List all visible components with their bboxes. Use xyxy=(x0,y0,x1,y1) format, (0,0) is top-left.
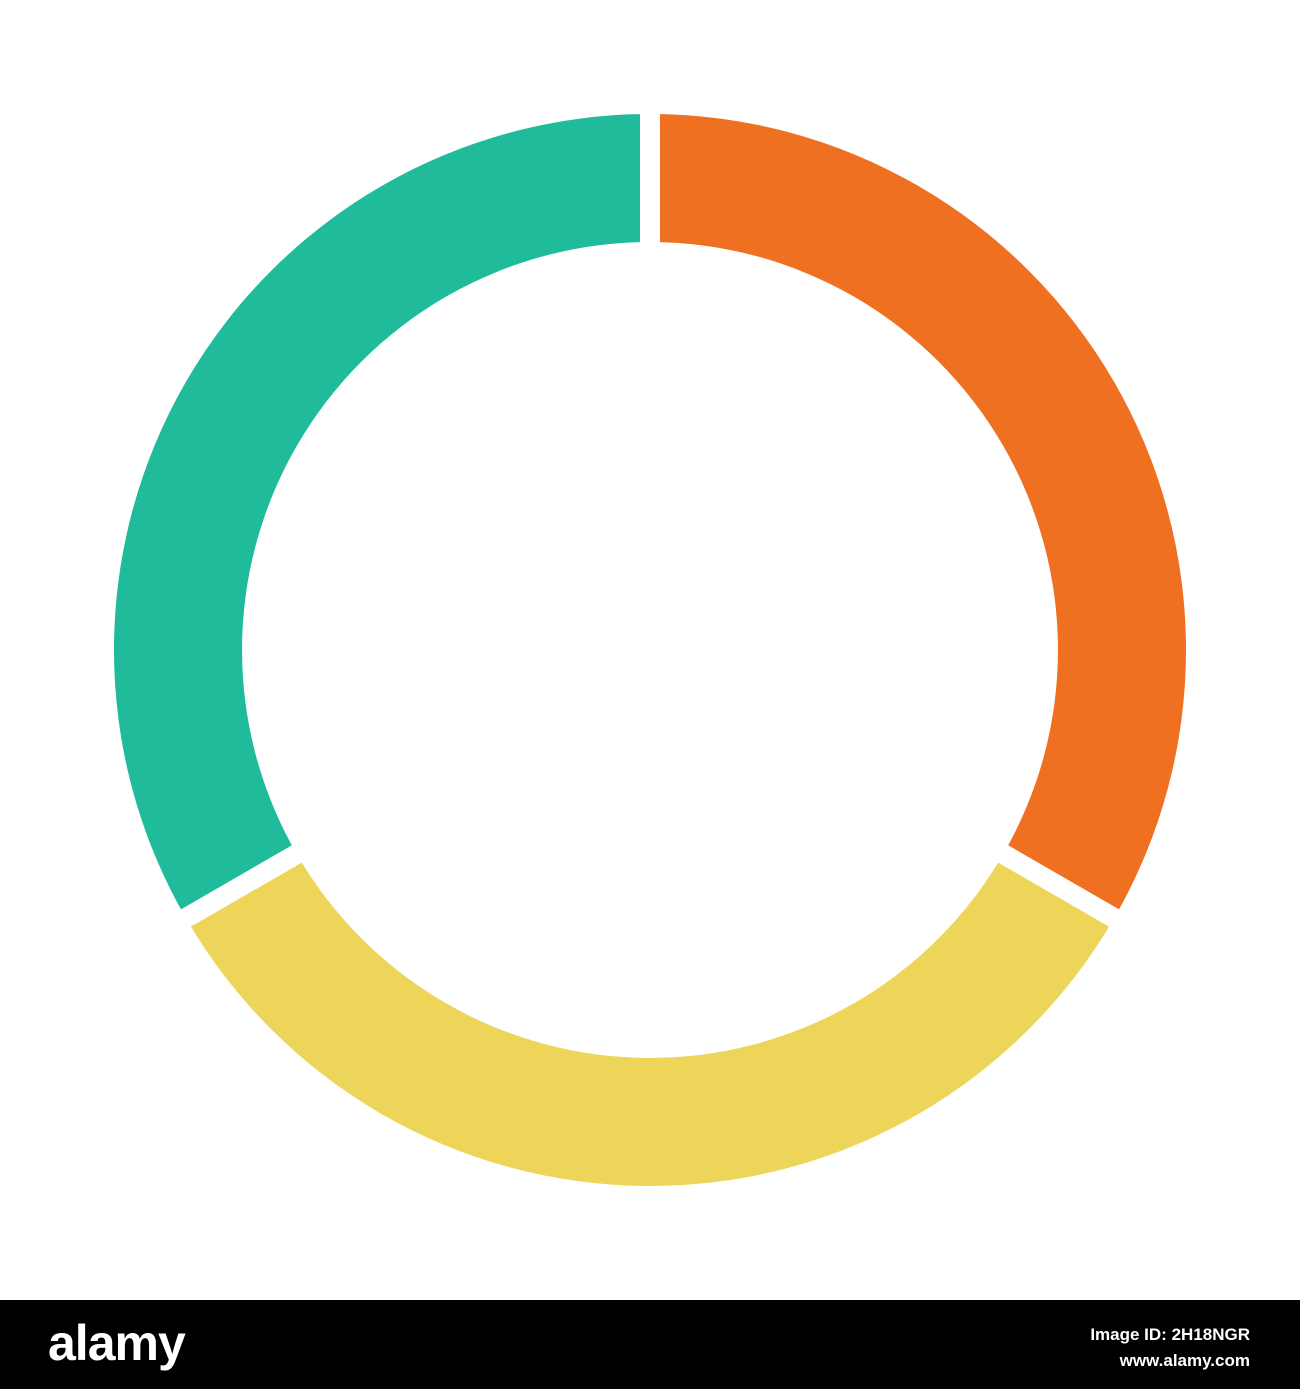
segment: teal xyxy=(114,114,650,918)
image id text: www.alamy.com xyxy=(1120,1351,1250,1370)
image id text: Image ID: 2H18NGR xyxy=(1090,1325,1250,1344)
segment: orange xyxy=(650,114,1186,918)
segment: yellow xyxy=(186,854,1114,1186)
image id text xyxy=(1090,1325,1250,1370)
logo: alamy: alamy xyxy=(48,1315,185,1371)
footer bar xyxy=(0,1300,1300,1389)
